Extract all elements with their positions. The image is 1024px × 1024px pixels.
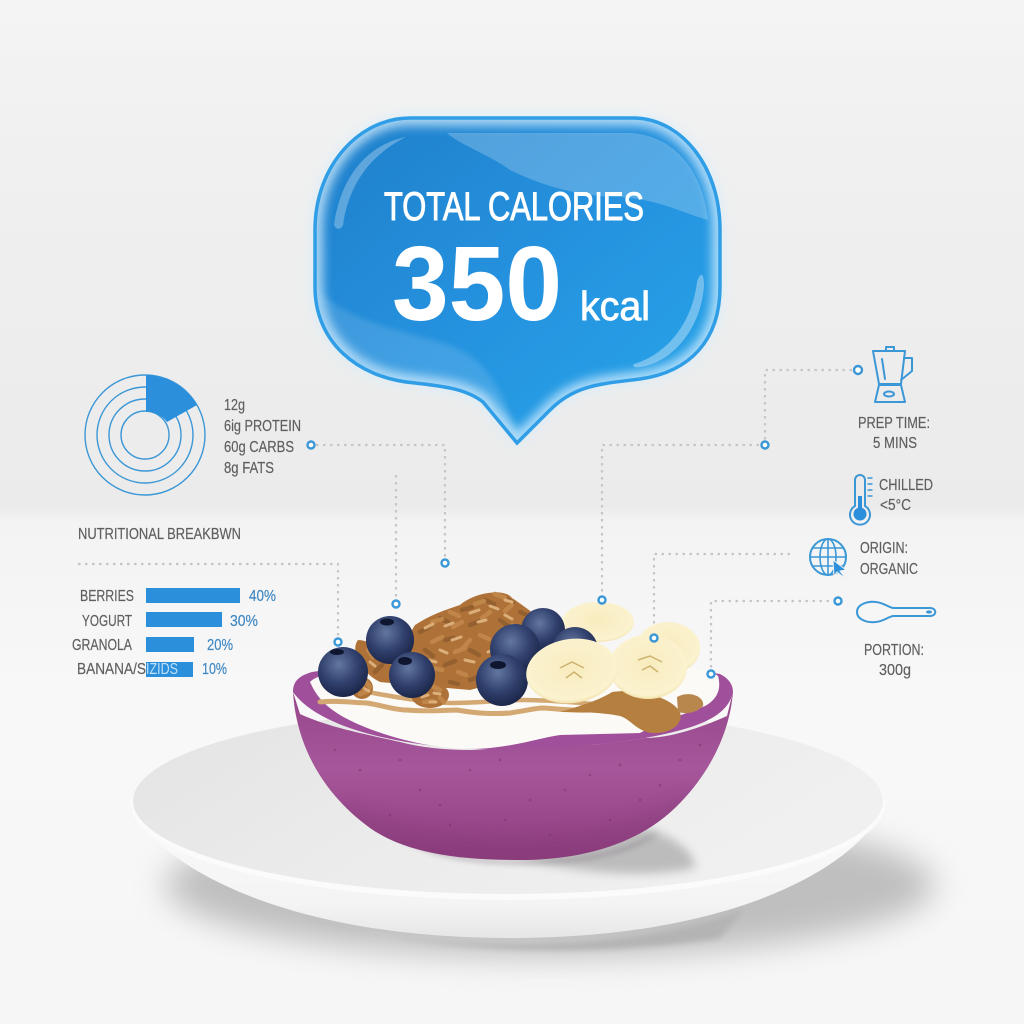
portion label: PORTION: [864, 642, 924, 659]
bar chart: ingredient breakdown: BANANA/S [77, 661, 146, 678]
macro labels: 60g CARBS [224, 439, 294, 456]
bubble heading: TOTAL CALORIES [384, 185, 644, 229]
macro labels: 12g [224, 397, 245, 414]
connector dots [308, 366, 862, 678]
prep time label: 5 MINS [873, 435, 917, 452]
prep time label: PREP TIME: [858, 415, 930, 432]
bar chart: ingredient breakdown: IZIDS [146, 661, 178, 678]
portion label: 300g [879, 662, 911, 679]
bar chart: ingredient breakdown: GRANOLA [72, 637, 132, 654]
granola cluster [351, 592, 555, 708]
bananas behind [562, 602, 700, 674]
macro labels [224, 397, 301, 477]
connector lines [78, 370, 852, 668]
bar chart: ingredient breakdown: BERRIES [80, 588, 134, 605]
origin label [860, 540, 918, 578]
chilled label: <5°C [880, 497, 911, 514]
origin label: ORIGIN: [860, 540, 908, 557]
icon: globe with cursor [810, 539, 846, 578]
bar chart: ingredient breakdown: YOGURT [82, 613, 132, 630]
radial macro chart [85, 375, 205, 495]
bar chart: ingredient breakdown: 30% [230, 613, 258, 630]
plate with shadow [130, 708, 935, 957]
chilled label [879, 477, 933, 514]
bowl body [293, 692, 733, 860]
bar chart: ingredient breakdown: 10% [202, 661, 227, 678]
icon: thermometer [850, 475, 872, 525]
speech bubble: total calories [315, 118, 720, 443]
icon: spoon [857, 602, 935, 622]
bar chart: ingredient breakdown [72, 588, 276, 678]
nutritional breakdown heading: NUTRITIONAL BREAKBWN [78, 526, 241, 543]
bar chart: ingredient breakdown: 20% [207, 637, 233, 654]
macro labels: 6ig PROTEIN [224, 418, 301, 435]
origin label: ORGANIC [860, 561, 918, 578]
macro labels: 8g FATS [224, 460, 274, 477]
peanut butter drizzle [320, 691, 703, 733]
calorie number: 350 [392, 225, 562, 343]
bowl shading [334, 744, 702, 854]
calorie unit: kcal [580, 283, 650, 329]
blueberries [318, 608, 598, 706]
bananas front [522, 633, 687, 709]
bowl inner rim [293, 663, 733, 750]
prep time label [858, 415, 930, 452]
icon: blender [873, 347, 912, 402]
acai bowl [293, 592, 733, 870]
portion label [864, 642, 924, 679]
bar chart: ingredient breakdown: 40% [249, 588, 276, 605]
chilled label: CHILLED [879, 477, 933, 494]
yogurt layer [310, 659, 719, 749]
